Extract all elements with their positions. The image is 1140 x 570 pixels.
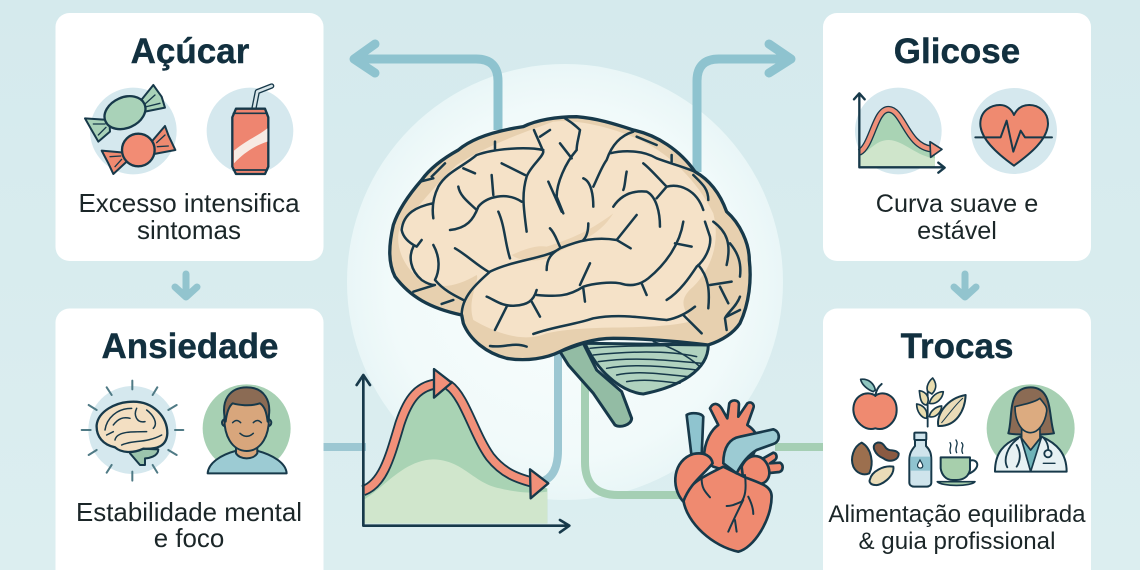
connector: heart to Trocas bbox=[775, 443, 824, 451]
panel: Açúcar bbox=[56, 13, 324, 261]
chart: pale lower area bbox=[363, 459, 547, 523]
panel: Glicose bbox=[823, 13, 1091, 261]
heart: aorta and branches bbox=[704, 400, 758, 477]
icon: candies bbox=[85, 85, 177, 174]
icon: nuts bbox=[852, 443, 899, 485]
text: Estabilidade mental e foco: e foco bbox=[154, 525, 224, 553]
cerebrum bbox=[390, 117, 750, 360]
icon: soda can bbox=[207, 86, 293, 174]
icon: grains and almond bbox=[917, 378, 966, 427]
text: Excesso intensifica sintomas: sintomas bbox=[137, 215, 241, 245]
icon: water bottle bbox=[909, 433, 931, 487]
arrow: Açúcar to Ansiedade bbox=[175, 274, 197, 297]
illustration: heart bbox=[675, 400, 783, 552]
icon: smiling person bbox=[203, 384, 291, 473]
panel: Trocas bbox=[823, 308, 1091, 570]
panel: Ansiedade bbox=[56, 308, 324, 570]
text: Alimentação equilibrada & guia profissional: & guia profissional bbox=[859, 528, 1055, 555]
text: Curva suave e estável: Curva suave e bbox=[876, 190, 1038, 218]
heart: right atrium bbox=[742, 456, 769, 484]
illustration: brain bbox=[390, 117, 750, 426]
heart: pulmonary artery bbox=[723, 429, 779, 473]
icon: tea cup bbox=[937, 440, 977, 485]
arrow: Glicose to Trocas bbox=[954, 274, 976, 297]
connector: brain to Glicose bbox=[697, 44, 791, 172]
cerebrum folds bbox=[402, 118, 740, 347]
heart: right vessels bbox=[763, 453, 783, 473]
text: Estabilidade mental e foco: Estabilidade mental bbox=[76, 499, 302, 527]
chart: green area bbox=[363, 386, 547, 523]
connector: brain to Açúcar bbox=[354, 44, 498, 130]
icon: glucose curve bbox=[854, 88, 945, 174]
heart: blue vein bbox=[687, 413, 703, 457]
connector: brain to heart bbox=[585, 350, 690, 495]
icon: apple bbox=[853, 379, 897, 429]
icon: calm brain bbox=[82, 381, 183, 481]
text: Curva suave e estável: estável bbox=[917, 217, 997, 245]
text: Excesso intensifica sintomas: Excesso intensifica bbox=[78, 188, 300, 218]
chart: axes bbox=[357, 375, 569, 532]
heart: coronary vessels bbox=[702, 475, 753, 532]
connector: brain to chart bbox=[540, 350, 558, 482]
icon: doctor bbox=[987, 384, 1075, 472]
heading: Açúcar: Açúcar bbox=[131, 32, 250, 71]
central glow circle bbox=[347, 64, 783, 500]
heart: left atrium bbox=[675, 453, 713, 502]
cerebellum bbox=[585, 342, 708, 394]
chart: descending ribbon bbox=[448, 385, 548, 498]
heading: Trocas: Trocas bbox=[901, 327, 1013, 366]
connector: chart to Ansiedade bbox=[323, 443, 366, 451]
chart: rising ribbon bbox=[363, 369, 452, 491]
icon: heart with pulse bbox=[971, 88, 1057, 174]
brain stem bbox=[560, 343, 632, 426]
heading: Ansiedade: Ansiedade bbox=[102, 327, 278, 366]
heading: Glicose: Glicose bbox=[894, 32, 1020, 71]
chart: glucose curve bbox=[357, 369, 569, 532]
heart: ventricles bbox=[683, 467, 772, 552]
text: Alimentação equilibrada & guia profissional: Alimentação equilibrada bbox=[828, 501, 1086, 528]
